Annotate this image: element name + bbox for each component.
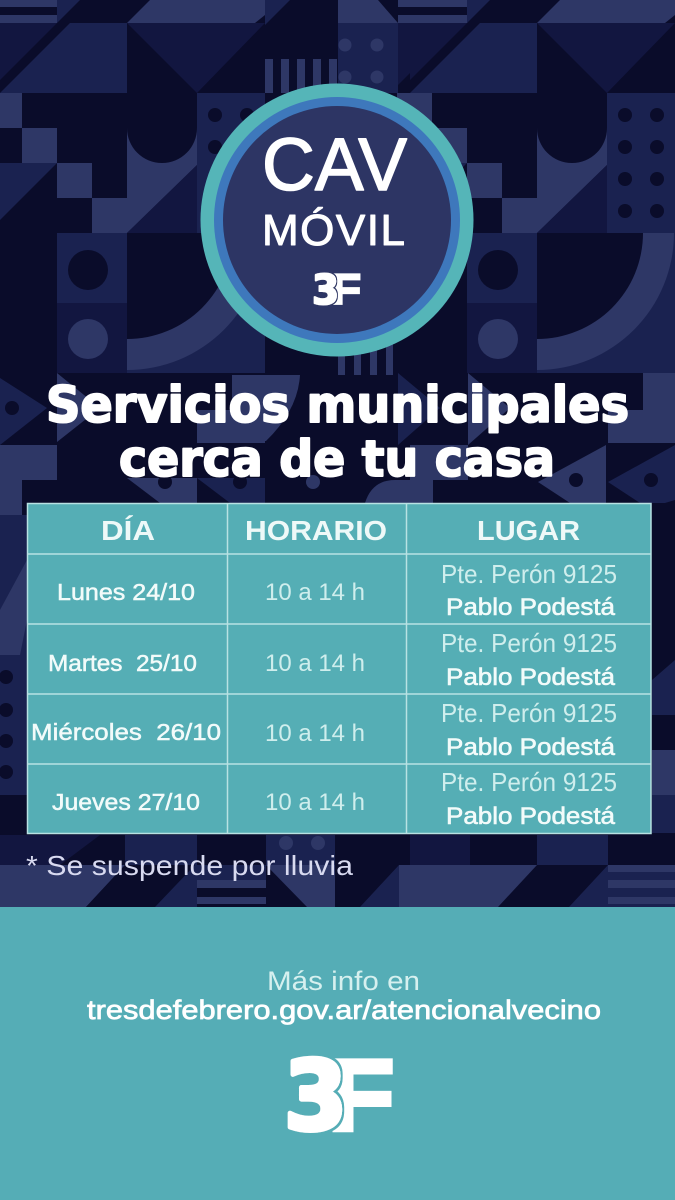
row: Miércoles [31, 698, 617, 761]
title: cerca de tu casa [119, 430, 555, 488]
logo: 3F large: 3 [284, 1042, 347, 1152]
row: Martes: 10 a 14 h [265, 650, 365, 677]
table header: LUGAR [477, 515, 580, 546]
row: Martes: Martes 25/10 [48, 650, 197, 676]
badge heading CAV: CAV [262, 123, 408, 206]
row: Jueves: 10 a 14 h [265, 789, 365, 816]
row: Lunes: 10 a 14 h [265, 579, 365, 606]
badge: CAV Móvil circle [200, 84, 474, 356]
row: Lunes: Pte. Perón 9125 [441, 559, 617, 589]
logo: 3F small [312, 266, 361, 314]
badge heading MÓVIL: MÓVIL [262, 206, 405, 255]
row: Jueves: Pte. Perón 9125 [441, 767, 617, 797]
row: Jueves: Jueves 27/10 [52, 789, 200, 815]
website URL: tresdefebrero.gov.ar/atencionalvecino [87, 995, 601, 1025]
more info text: Más info en [267, 966, 420, 996]
row: Martes: Pablo Podestá [446, 664, 616, 691]
schedule table [27, 503, 651, 834]
row: Miércoles: 10 a 14 h [265, 720, 365, 747]
row: Miércoles: Pablo Podestá [446, 734, 616, 761]
footer panel [0, 907, 675, 1200]
logo: 3F small: 3 [312, 266, 339, 314]
table header: HORARIO [245, 515, 387, 546]
row: Jueves: Pablo Podestá [446, 803, 616, 830]
logo: 3F small: F [331, 266, 361, 314]
logo: 3F large: F [328, 1040, 394, 1152]
row: Martes: Pte. Perón 9125 [441, 628, 617, 658]
row: Jueves [52, 767, 617, 830]
row: Lunes: Pablo Podestá [446, 594, 616, 621]
title [46, 376, 629, 488]
row: Miércoles: Pte. Perón 9125 [441, 698, 617, 728]
background pattern [0, 0, 675, 907]
table header [101, 515, 580, 546]
row: Lunes [57, 559, 617, 621]
title: Servicios municipales [46, 376, 629, 434]
logo: 3F large [284, 1040, 394, 1152]
table header: DÍA [101, 515, 155, 546]
rain note: * Se suspende por lluvia [26, 850, 353, 881]
row: Miércoles: Miércoles 26/10 [31, 719, 221, 745]
row: Lunes: Lunes 24/10 [57, 579, 195, 605]
row: Martes [48, 628, 617, 691]
